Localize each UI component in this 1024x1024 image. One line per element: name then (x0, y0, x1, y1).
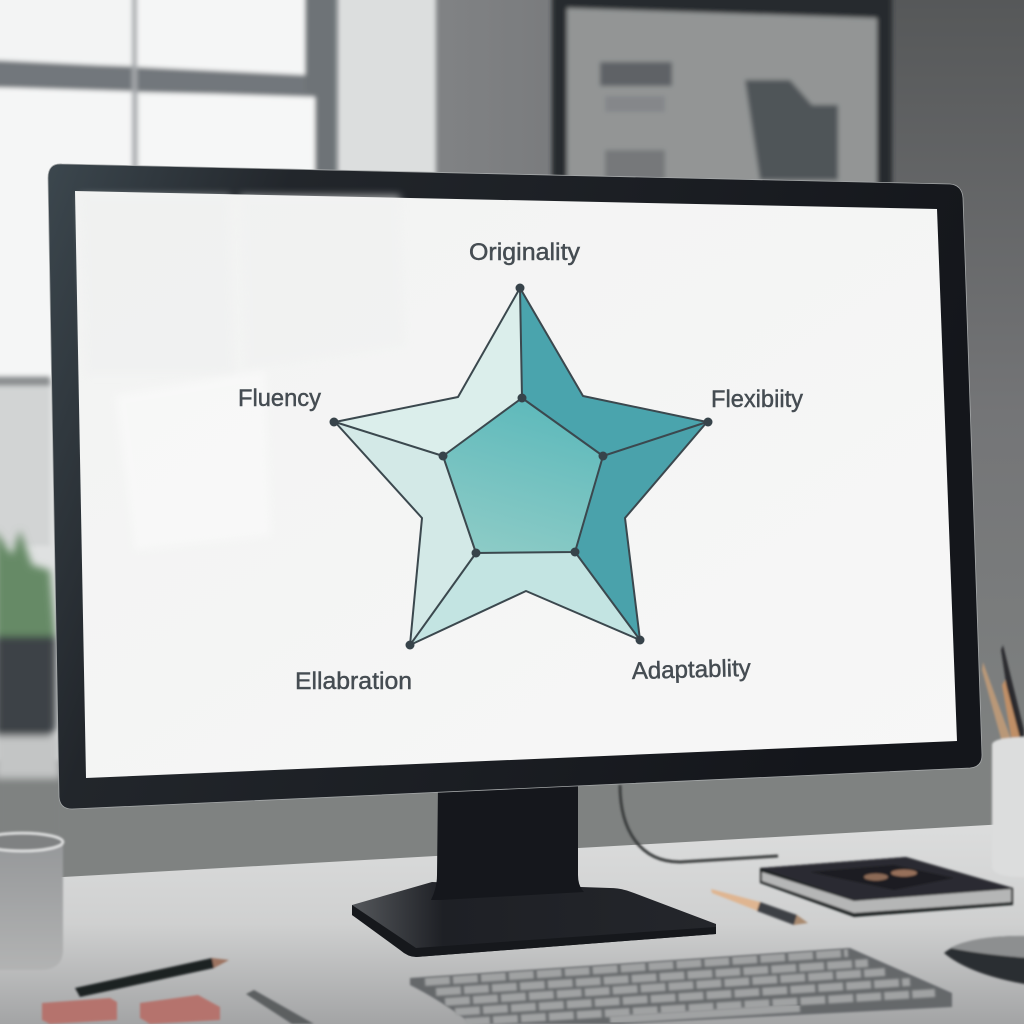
black pencil (75, 958, 229, 997)
desk (0, 823, 1024, 1024)
notebook (760, 857, 1013, 917)
erasers (42, 995, 220, 1024)
keyboard (410, 948, 952, 1024)
label: Fluency: Fluency (238, 385, 321, 412)
monitor screen (75, 191, 957, 778)
chart outlines (335, 288, 707, 645)
pencil cup (982, 645, 1024, 877)
screen window reflection (80, 195, 405, 550)
inner pentagon (443, 398, 603, 553)
star segment: elaboration left (335, 422, 476, 645)
label: Originality: Originality (469, 239, 580, 266)
pen at bottom (246, 990, 314, 1024)
monitor cable (620, 785, 778, 862)
star segment: originality right (520, 288, 707, 456)
monitor stand (352, 785, 716, 957)
chart points (330, 284, 712, 650)
right wall shading (890, 0, 1024, 830)
monitor bezel (48, 164, 982, 809)
mouse (944, 936, 1024, 985)
star segment: originality left (335, 288, 522, 456)
star segment: flexibility lower (575, 422, 707, 640)
pencil on desk (711, 889, 808, 925)
wall lower band (60, 760, 1024, 880)
framed picture (552, 0, 892, 190)
stand neck (431, 785, 584, 900)
stand base (352, 882, 716, 957)
plant on windowsill (0, 530, 63, 838)
window (0, 0, 436, 760)
label: Elaboration: Ellabration (295, 668, 412, 695)
radar chart (330, 284, 712, 650)
label: Adaptability: Adaptablity (631, 655, 751, 685)
star segment: adaptability lower (410, 552, 640, 645)
mug (0, 833, 63, 970)
label: Flexibility: Flexibiity (711, 386, 803, 413)
